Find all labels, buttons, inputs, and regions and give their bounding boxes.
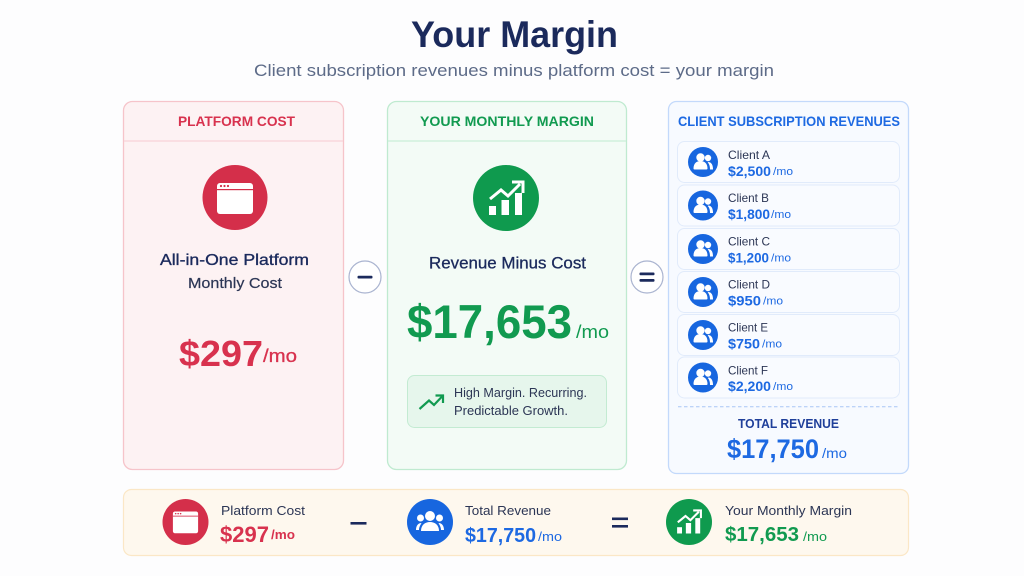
summary: total revenue: $17,750 bbox=[465, 525, 536, 547]
price: $297/mo bbox=[179, 333, 297, 374]
summary: platform cost: Platform Cost bbox=[221, 503, 305, 518]
row: client E bbox=[678, 314, 900, 356]
callout text: High Margin. Recurring. bbox=[454, 385, 587, 400]
row: client F: /mo bbox=[773, 381, 793, 393]
row: client D bbox=[678, 272, 900, 312]
price: $17,653/mo: $17,653 bbox=[407, 295, 572, 348]
row: client F: Client F bbox=[728, 364, 768, 378]
price: total revenue: $17,750 bbox=[727, 434, 819, 464]
row: client A: /mo bbox=[773, 166, 793, 178]
row: client C: $1,200 bbox=[728, 250, 769, 266]
row: client B: Client B bbox=[728, 191, 769, 205]
row: client A: $2,500 bbox=[728, 164, 771, 179]
row: client B: /mo bbox=[771, 209, 791, 221]
row: client C bbox=[678, 228, 900, 270]
text: revenue minus cost: Revenue Minus Cost bbox=[429, 254, 586, 272]
icon: browser window bbox=[202, 165, 268, 230]
row: client C: /mo bbox=[771, 252, 791, 264]
price: $17,653/mo: /mo bbox=[576, 322, 609, 342]
summary: total revenue bbox=[465, 503, 562, 547]
heading: your monthly margin: YOUR MONTHLY MARGIN bbox=[420, 113, 594, 129]
row: client A: Client A bbox=[728, 148, 770, 162]
icon: growth chart bbox=[666, 499, 712, 545]
icon: group of people bbox=[407, 499, 453, 545]
summary: total revenue: Total Revenue bbox=[465, 503, 551, 518]
summary: total revenue: /mo bbox=[538, 529, 562, 544]
operator: equals bbox=[612, 518, 628, 528]
row: client B: $1,800 bbox=[728, 207, 770, 222]
summary: your monthly margin bbox=[725, 503, 852, 546]
row: client A bbox=[678, 142, 900, 182]
panel: summary equation bbox=[124, 490, 908, 556]
heading: platform cost: PLATFORM COST bbox=[178, 113, 295, 129]
operator: minus bbox=[350, 522, 366, 525]
text: total revenue label: TOTAL REVENUE bbox=[738, 416, 839, 431]
row: client F: $2,200 bbox=[728, 379, 771, 394]
icon: trend arrow bbox=[420, 396, 443, 409]
title: Your Margin bbox=[411, 14, 618, 55]
price: total revenue: /mo bbox=[822, 445, 847, 461]
row: client F bbox=[678, 357, 900, 398]
subtitle: Client subscription revenues minus platform cost = your margin bbox=[254, 61, 774, 80]
callout: high margin bbox=[408, 376, 606, 428]
text: all-in-one platform: All-in-One Platform bbox=[160, 252, 309, 269]
callout text bbox=[454, 385, 587, 418]
operator: minus bbox=[349, 261, 381, 293]
price: $297/mo: $297 bbox=[179, 333, 263, 374]
summary: platform cost: $297 bbox=[220, 522, 269, 547]
price: $297/mo: /mo bbox=[263, 346, 297, 366]
row: client C: Client C bbox=[728, 234, 770, 248]
summary: your monthly margin: Your Monthly Margin bbox=[725, 503, 852, 518]
icon: browser window bbox=[162, 499, 208, 545]
summary: your monthly margin: /mo bbox=[803, 529, 827, 544]
callout text: Predictable Growth. bbox=[454, 403, 568, 418]
summary: your monthly margin: $17,653 bbox=[725, 524, 799, 546]
row: client E: Client E bbox=[728, 320, 768, 334]
row: client D: Client D bbox=[728, 278, 770, 292]
row: client E: $750 bbox=[728, 336, 760, 352]
panel: your monthly margin bbox=[388, 102, 626, 470]
panel: client subscription revenues bbox=[668, 102, 908, 474]
summary: platform cost bbox=[220, 503, 305, 547]
panel: platform cost bbox=[124, 102, 344, 470]
row: client E: /mo bbox=[762, 338, 782, 350]
row: client B bbox=[678, 185, 900, 226]
summary: platform cost: /mo bbox=[271, 528, 295, 542]
icon: growth chart bbox=[473, 165, 539, 231]
heading: client subscription revenues: CLIENT SUBSCRIPTION REVENUES bbox=[678, 113, 900, 129]
operator: equals bbox=[631, 261, 663, 293]
row: client D: /mo bbox=[763, 296, 783, 308]
row: client D: $950 bbox=[728, 294, 761, 308]
text: monthly cost: Monthly Cost bbox=[188, 275, 283, 292]
